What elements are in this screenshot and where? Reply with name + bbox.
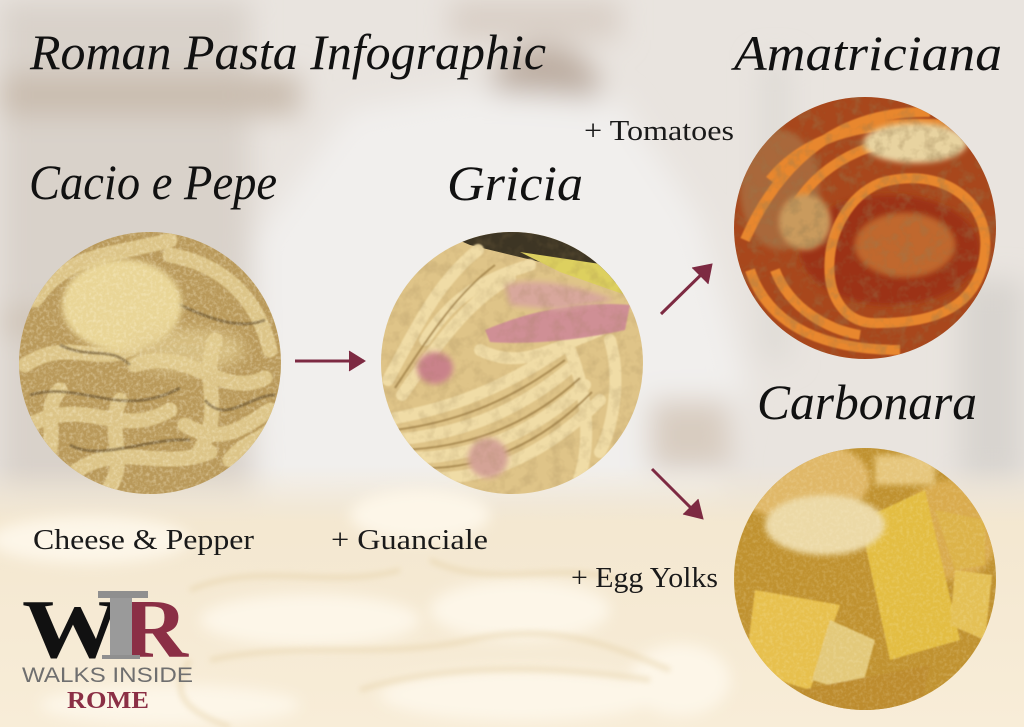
arrow: cacio e pepe to gricia [295, 351, 365, 371]
arrow: gricia to amatriciana [661, 264, 712, 314]
label: + Tomatoes: + Tomatoes [584, 116, 734, 147]
logo: Walks Inside Rome: ROME [67, 688, 149, 714]
logo: Walks Inside Rome [22, 583, 193, 714]
label: Cheese & Pepper: Cheese & Pepper [33, 525, 255, 556]
label: + Egg Yolks: + Egg Yolks [571, 563, 718, 594]
label: + Guanciale: + Guanciale [331, 525, 488, 556]
photo: amatriciana [734, 97, 996, 359]
photo: cacio e pepe [19, 232, 281, 494]
heading: Amatriciana: Amatriciana [731, 25, 1002, 81]
title: Roman Pasta Infographic [29, 24, 546, 80]
photo: gricia [381, 232, 643, 494]
heading: Cacio e Pepe: Cacio e Pepe [29, 154, 277, 210]
heading: Gricia: Gricia [447, 155, 583, 211]
logo: Walks Inside Rome: W [22, 583, 122, 676]
logo: Walks Inside Rome: WALKS INSIDE [22, 664, 193, 687]
arrow: gricia to carbonara [652, 469, 703, 519]
logo: Walks Inside Rome: R [122, 583, 189, 676]
heading: Carbonara: Carbonara [757, 374, 977, 430]
background: pasta dough at bottom [0, 465, 1024, 727]
photo: carbonara [730, 440, 1000, 712]
